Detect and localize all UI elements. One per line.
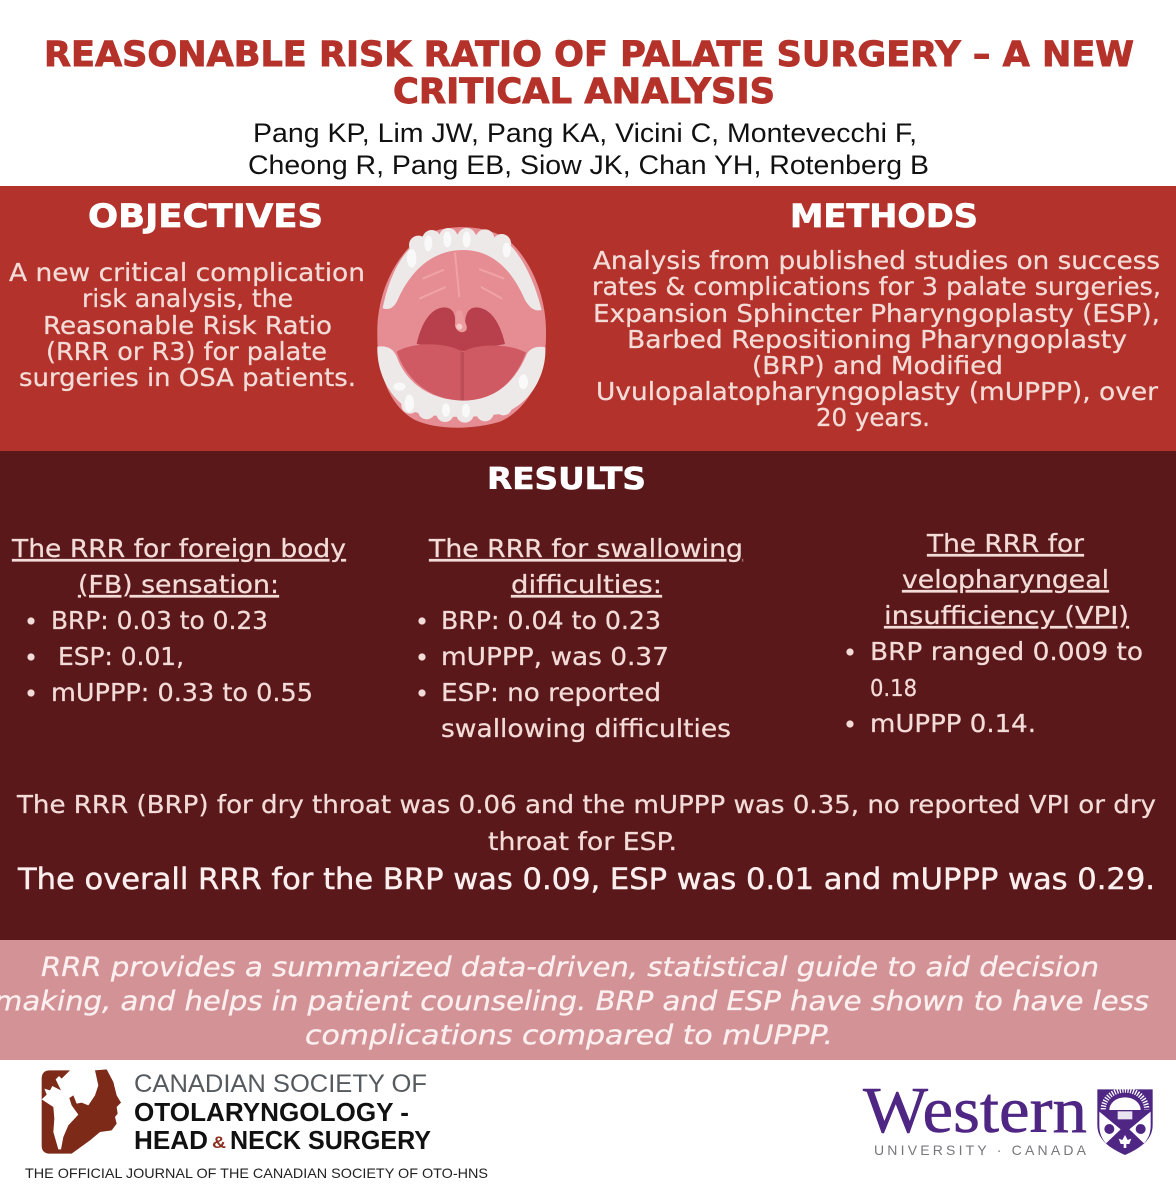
text: society name: OTOLARYNGOLOGY - [134, 1097, 409, 1127]
text: methods: 20 years. [816, 403, 930, 432]
column: foreign body sensation [11, 534, 346, 707]
title: REASONABLE RISK RATIO OF PALATE SURGERY – A NEW [44, 35, 1134, 75]
column: swallowing difficulties: swallowing difficulties [441, 714, 731, 743]
text: society name: & [212, 1133, 226, 1152]
panel: conclusion [0, 940, 1176, 1060]
column: foreign body sensation: (FB) sensation: [78, 570, 279, 599]
column: velopharyngeal insufficiency: 0.18 [870, 676, 917, 702]
column: swallowing difficulties: BRP: 0.04 to 0.23 [441, 606, 661, 635]
column: velopharyngeal insufficiency: mUPPP 0.14. [870, 709, 1036, 738]
text: society name: HEAD [134, 1125, 208, 1155]
text: dry throat: The RRR (BRP) for dry throat was 0.06 and the mUPPP was 0.35, no reported VPI or dry [16, 790, 1156, 819]
column: swallowing difficulties: difficulties: [511, 570, 662, 599]
text: society name: NECK SURGERY [230, 1125, 431, 1155]
column: swallowing difficulties: mUPPP, was 0.37 [441, 642, 669, 671]
text: methods: Uvulopalatopharyngoplasty (mUPPP), over [596, 377, 1159, 406]
text: society name: CANADIAN SOCIETY OF [134, 1070, 427, 1098]
text: dry throat: throat for ESP. [488, 827, 677, 856]
column: velopharyngeal insufficiency: velopharyngeal [902, 565, 1109, 594]
column: foreign body sensation: BRP: 0.03 to 0.23 [51, 606, 268, 635]
text: journal tagline: THE OFFICIAL JOURNAL OF THE CANADIAN SOCIETY OF OTO-HNS [25, 1165, 488, 1181]
text: methods: (BRP) and Modified [752, 351, 1003, 380]
heading: results: RESULTS [487, 462, 646, 497]
text: objectives: A new critical complication [9, 258, 365, 287]
authors: Cheong R, Pang EB, Siow JK, Chan YH, Rotenberg B [248, 150, 929, 180]
text: overall RRR: The overall RRR for the BRP was 0.09, ESP was 0.01 and mUPPP was 0.29. [17, 862, 1155, 896]
heading: objectives: OBJECTIVES [88, 197, 323, 235]
icon: maple leaf and face profile [42, 1069, 121, 1154]
text: conclusion [0, 952, 1149, 1051]
panel: results [0, 451, 1176, 940]
text: objectives: risk analysis, the [82, 284, 293, 313]
icon: open mouth [377, 227, 546, 428]
text: society name [134, 1070, 431, 1155]
column: velopharyngeal insufficiency: The RRR for [926, 529, 1085, 558]
text: methods: Analysis from published studies on success [593, 246, 1160, 275]
icon: Western shield [1097, 1089, 1153, 1155]
column: velopharyngeal insufficiency [846, 529, 1143, 738]
column: foreign body sensation: mUPPP: 0.33 to 0.55 [51, 678, 313, 707]
authors [248, 118, 929, 180]
text: dry throat [16, 790, 1156, 856]
panel: objectives and methods [0, 186, 1176, 451]
title [44, 35, 1134, 112]
text: methods: Barbed Repositioning Pharyngoplasty [627, 325, 1127, 354]
text: university canada: UNIVERSITY · CANADA [874, 1142, 1087, 1158]
text: objectives: (RRR or R3) for palate [46, 337, 327, 366]
title: CRITICAL ANALYSIS [393, 72, 775, 112]
column: swallowing difficulties: ESP: no reported [441, 678, 661, 707]
header panel [0, 0, 1176, 186]
column: velopharyngeal insufficiency: BRP ranged 0.009 to [870, 637, 1143, 666]
text: objectives: surgeries in OSA patients. [19, 363, 356, 392]
column: foreign body sensation: ESP: 0.01, [58, 642, 184, 671]
text: objectives: Reasonable Risk Ratio [43, 311, 332, 340]
logo: Western University [863, 1074, 1153, 1158]
text: objectives [9, 258, 365, 392]
column: foreign body sensation: The RRR for foreign body [11, 534, 346, 563]
text: conclusion: making, and helps in patient counseling. BRP and ESP have shown to have less [0, 986, 1149, 1017]
text: methods: rates & complications for 3 palate surgeries, [592, 272, 1161, 301]
text: conclusion: complications compared to mUPPP. [305, 1020, 833, 1051]
authors: Pang KP, Lim JW, Pang KA, Vicini C, Montevecchi F, [253, 118, 917, 148]
column: velopharyngeal insufficiency: insufficiency (VPI) [884, 601, 1129, 630]
text: Western wordmark: Western [863, 1074, 1087, 1147]
text: methods [592, 246, 1161, 432]
text: conclusion: RRR provides a summarized data-driven, statistical guide to aid decision [41, 952, 1099, 983]
column: swallowing difficulties [418, 534, 743, 743]
column: swallowing difficulties: The RRR for swallowing [428, 534, 743, 563]
logo: Canadian Society of Otolaryngology [25, 1069, 488, 1181]
text: methods: Expansion Sphincter Pharyngoplasty (ESP), [593, 299, 1160, 328]
heading: methods: METHODS [790, 197, 978, 235]
